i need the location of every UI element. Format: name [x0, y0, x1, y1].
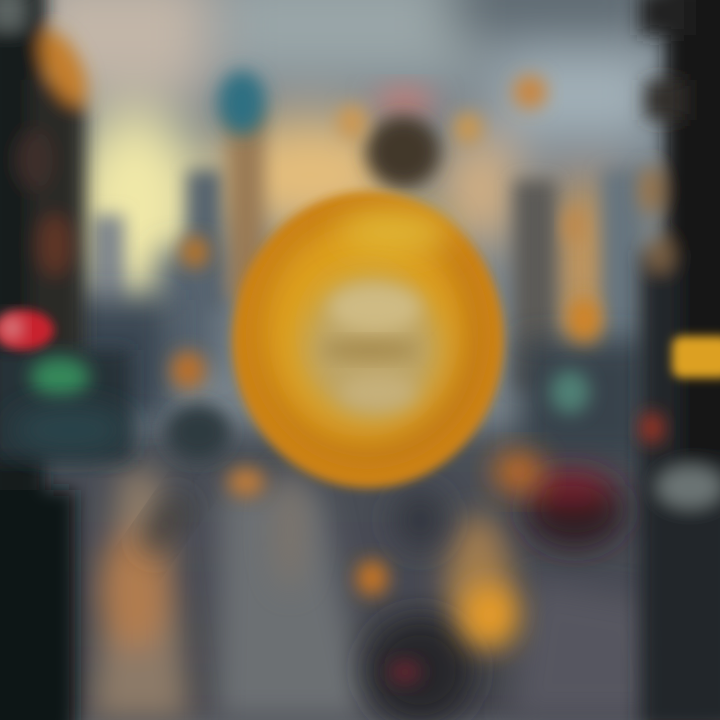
floating orange coins [171, 75, 601, 684]
road [0, 430, 720, 720]
center vehicle [166, 404, 230, 460]
road reflections [90, 470, 510, 720]
mid-distance buildings [70, 110, 650, 460]
character head behind coin [366, 88, 440, 188]
traffic light red [0, 310, 54, 350]
gold coin [232, 192, 504, 488]
right cars [365, 471, 625, 720]
traffic light green [30, 357, 90, 397]
traffic light white highlight [2, 316, 22, 340]
right dark buildings [638, 0, 720, 720]
pedestrian shadow [134, 489, 196, 561]
orange tail lights [494, 452, 542, 492]
yellow sign right [672, 336, 720, 378]
left car [10, 406, 130, 454]
left dark buildings [0, 0, 130, 720]
red light right [640, 412, 664, 444]
tower top: teal [218, 71, 266, 135]
green glow right [550, 370, 590, 414]
